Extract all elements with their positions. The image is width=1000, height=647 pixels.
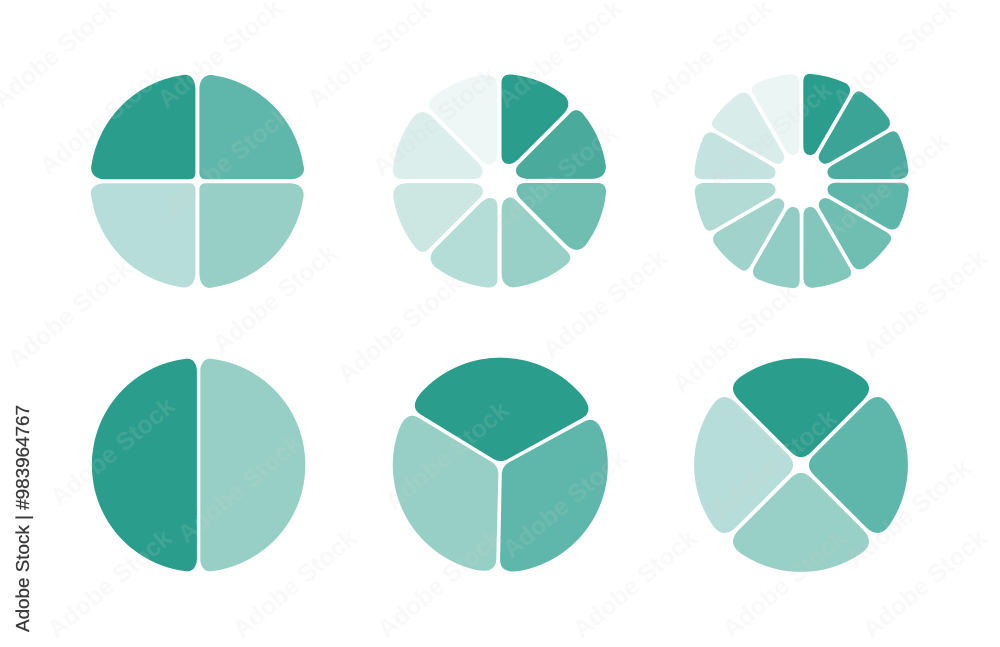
segment 4 of 8 — [463, 194, 573, 305]
segment 10 of 12 — [694, 132, 776, 179]
chart: circle split into four diagonal segments — [694, 358, 908, 572]
segment 1 of 8 — [502, 74, 568, 164]
watermark pattern: Adobe Stock — [702, 76, 837, 196]
watermark pattern: Adobe Stock — [841, 454, 976, 574]
segment 2 of 8 — [513, 107, 624, 218]
segment: top — [733, 358, 869, 457]
segment 7 of 12 — [753, 207, 800, 288]
segment 3 of 8 — [516, 183, 606, 250]
watermark pattern: Adobe Stock — [497, 444, 632, 564]
watermark pattern: Adobe Stock — [857, 244, 992, 364]
watermark pattern: Adobe Stock — [857, 524, 992, 644]
segment: top — [414, 356, 590, 463]
segment 5 of 12 — [800, 196, 893, 277]
chart: circle split into eight segments — [375, 57, 624, 305]
segment: top left quarter — [91, 75, 195, 179]
segment: left half — [92, 359, 197, 571]
watermark pattern: Adobe Stock — [332, 269, 467, 389]
segment 8 of 12 — [706, 179, 787, 273]
segment: top right quarter — [199, 75, 304, 179]
watermark pattern: Adobe Stock — [667, 279, 802, 399]
segment: right — [809, 397, 908, 533]
segment: bottom right — [459, 393, 637, 595]
segment 11 of 12 — [710, 85, 803, 166]
segment: bottom right quarter — [199, 183, 304, 288]
watermark pattern: Adobe Stock — [172, 429, 307, 549]
segment: left — [694, 397, 793, 533]
watermark pattern: Adobe Stock — [367, 62, 502, 182]
segment 5 of 8 — [431, 198, 498, 288]
watermark pattern: Adobe Stock — [567, 524, 702, 644]
watermark pattern: Adobe Stock — [372, 524, 507, 644]
segment 9 of 12 — [684, 152, 778, 233]
segment 4 of 12 — [828, 183, 909, 230]
chart: circle split into two halves — [92, 359, 305, 571]
segment: right half — [200, 359, 305, 571]
segment 3 of 12 — [825, 129, 919, 210]
watermark pattern: Adobe Stock — [707, 404, 842, 524]
watermark pattern: Adobe Stock — [207, 239, 342, 359]
watermark pattern: Adobe Stock — [42, 524, 177, 644]
watermark pattern: Adobe Stock — [34, 61, 169, 181]
segment: bottom left quarter — [91, 183, 195, 288]
chart: circle split into twelve segments — [684, 64, 919, 298]
segment: bottom — [733, 473, 869, 572]
watermark pattern: Adobe Stock — [379, 396, 514, 516]
segment 6 of 8 — [375, 144, 486, 255]
watermark pattern: Adobe Stock — [537, 244, 672, 364]
watermark pattern: Adobe Stock — [487, 119, 622, 239]
watermark pattern: Adobe Stock — [45, 392, 180, 512]
watermark pattern: Adobe Stock — [717, 524, 852, 644]
chart: circle split into four quarters — [91, 75, 304, 288]
watermark pattern: Adobe Stock — [160, 101, 295, 221]
watermark pattern: Adobe Stock — [2, 254, 137, 374]
segment 6 of 12 — [772, 204, 853, 298]
chart: circle split into three segments — [361, 355, 639, 597]
watermark pattern: Adobe Stock — [227, 524, 362, 644]
segment: bottom left — [364, 391, 538, 593]
segment 7 of 8 — [393, 112, 482, 179]
segment 12 of 12 — [750, 64, 831, 158]
vertical stock credit text: Adobe Stock | #983964767 — [13, 405, 33, 632]
segment 1 of 12 — [803, 74, 850, 155]
segment 8 of 8 — [426, 57, 536, 168]
segment 2 of 12 — [816, 89, 897, 183]
watermark pattern: Adobe Stock — [819, 127, 954, 247]
